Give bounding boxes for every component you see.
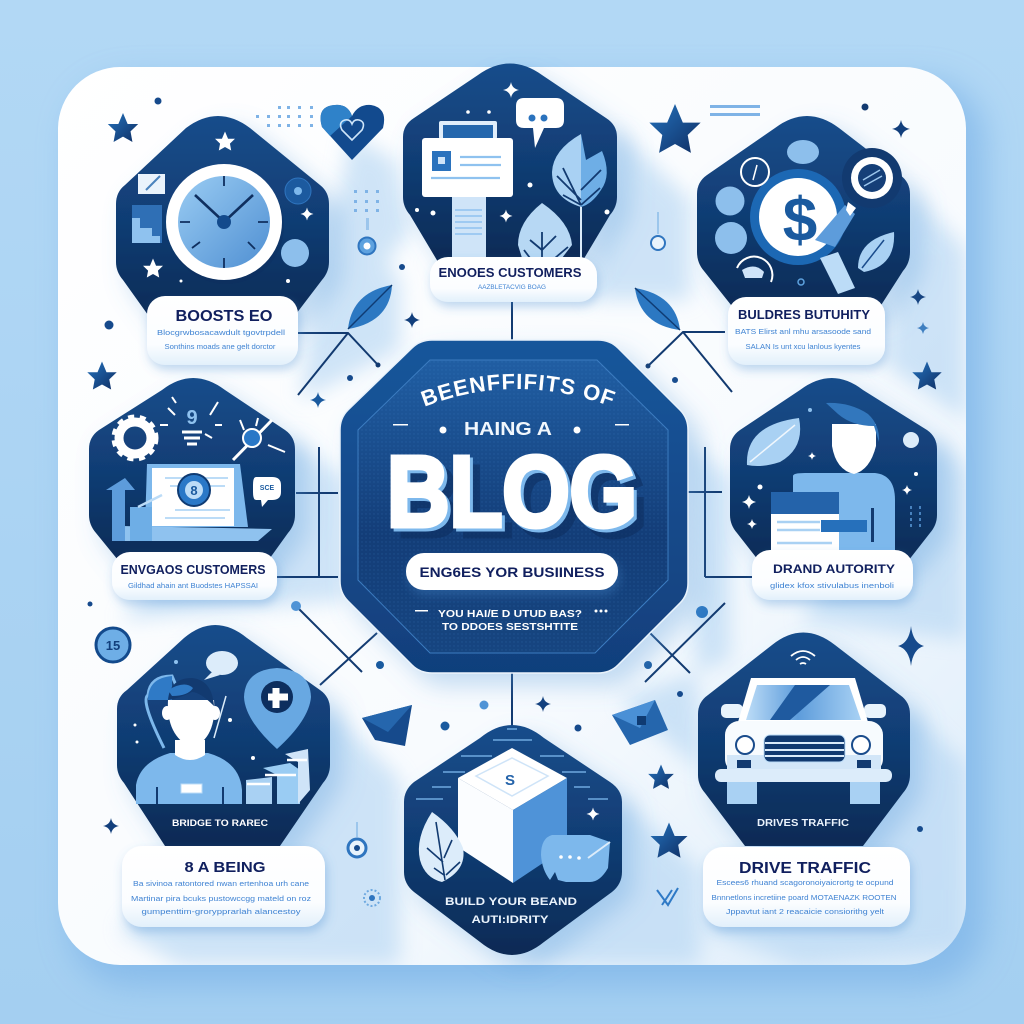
icon: round badges xyxy=(715,140,894,285)
card: drive traffic: Bnnnetlons incretiine poard MOTAENAZK ROOTEN xyxy=(712,893,896,902)
icon: light bulb: 9 xyxy=(186,407,198,429)
soft diagonal shadows xyxy=(120,130,966,965)
card: boosts SEO: BOOSTS EO xyxy=(176,308,272,325)
card: drive traffic: DRIVE TRAFFIC xyxy=(739,860,871,877)
hexagon label: BRIDGE TO RAREC xyxy=(172,818,269,828)
icon: dollar magnifier: $ xyxy=(783,186,817,255)
panel: being xyxy=(117,625,330,927)
hexagon background xyxy=(404,725,622,955)
hexagon background xyxy=(730,378,937,565)
dot texture xyxy=(358,360,668,653)
card: being: gumpenttim-grorypprarlah alancestoy xyxy=(142,907,301,916)
title: BLOG xyxy=(387,436,637,548)
card: enooes customers xyxy=(430,257,597,302)
icon: heart xyxy=(321,105,384,160)
icon: laptop: 8 xyxy=(190,483,198,498)
icon: speech bubble xyxy=(516,98,564,148)
icon: leaf right connector xyxy=(635,288,680,330)
pill label: ENG6ES YOR BUSIINESS xyxy=(420,564,604,580)
icon: calendar badge xyxy=(96,628,130,662)
panel: build brand authority xyxy=(404,725,622,955)
icon: light bulb xyxy=(160,397,222,444)
icon: leaf left connector xyxy=(348,285,392,329)
card: enooes customers: ENOOES CUSTOMERS xyxy=(438,266,582,280)
icon: dollar magnifier xyxy=(750,148,902,294)
hexagon background xyxy=(89,378,295,565)
panel: builds authority xyxy=(697,116,910,365)
card: being: Martinar pira bcuks pustowccgg mateld on roz xyxy=(131,894,311,903)
decorative dashes xyxy=(416,729,608,799)
icon: signboard xyxy=(422,121,513,259)
sub heading: HAING A xyxy=(464,419,552,439)
icon: calendar badge: 15 xyxy=(106,638,120,653)
hexagon label xyxy=(445,896,577,926)
hexagon label: AUTI:IDRITY xyxy=(472,914,549,926)
icon: small mark bottom right xyxy=(657,888,678,905)
card: drive traffic: Jppavtut iant 2 reacaicie consiorithg yelt xyxy=(726,907,885,916)
card: enooes customers: AAZBLETACVIG BOAG xyxy=(478,284,546,291)
panel: engages customers top xyxy=(403,64,617,302)
card: brand authority: DRAND AUTORITY xyxy=(773,562,895,576)
icon: leaves xyxy=(415,82,610,258)
card: boosts SEO xyxy=(147,296,298,365)
card: brand authority xyxy=(752,550,913,600)
icon: charts and tools xyxy=(106,418,285,541)
icon: bubble xyxy=(134,651,255,760)
card: drive traffic: Escees6 rhuand scagoronoiyaicrortg te ocpund xyxy=(716,878,894,887)
icon: car xyxy=(715,678,892,804)
icon: cube: S xyxy=(505,772,515,789)
card: builds authority: BULDRES BUTUHITY xyxy=(738,308,871,322)
dot grids xyxy=(256,105,760,212)
card: engages customers left: ENVGAOS CUSTOMERS xyxy=(120,563,266,577)
panel: engages customers left xyxy=(89,378,295,600)
card: engages customers left xyxy=(112,552,277,600)
hexagon label: DRIVES TRAFFIC xyxy=(757,818,849,829)
footer text xyxy=(415,608,608,633)
card: drive traffic xyxy=(703,847,910,927)
icon: person xyxy=(136,676,242,804)
card: builds authority: SALAN Is unt xcu lanlous kyentes xyxy=(746,342,861,351)
heading decorations xyxy=(393,424,629,434)
title depth: BLOG xyxy=(390,439,640,551)
hexagon background xyxy=(117,625,330,846)
icon: cube xyxy=(458,748,567,883)
card: builds authority xyxy=(728,297,885,365)
card: brand authority: glidex kfox stivulabus inenboli xyxy=(770,583,895,590)
icon: laptop xyxy=(112,464,272,541)
card: being: 8 A BEING xyxy=(184,859,266,876)
icon: speech bubble xyxy=(541,808,610,882)
decorative stars and sparkles xyxy=(87,98,942,858)
card: engages customers left: Gildhad ahain ant Buodstes HAPSSAI xyxy=(128,583,258,590)
card: builds authority: BATS Elirst anl mhu arsasoode sand xyxy=(735,327,871,336)
icon: person with book xyxy=(771,403,895,552)
card: boosts SEO: Blocgrwbosacawdult tgovtrpdell xyxy=(157,328,285,337)
pill label xyxy=(406,553,618,590)
heading arc xyxy=(417,389,620,410)
panel: brand authority xyxy=(730,378,937,600)
heading curved text: BEENFFIFITS OF xyxy=(420,374,616,406)
hexagon background xyxy=(116,116,329,322)
icon: leaf and details xyxy=(742,408,920,530)
card: being: Ba sivinoa ratontored nwan ertenhoa urh cane xyxy=(133,879,309,888)
panel: boosts SEO xyxy=(116,116,329,365)
icon: buildings xyxy=(246,749,310,804)
icon: envelope right xyxy=(612,700,668,745)
icon: leaf xyxy=(419,812,464,882)
hexagon label: BUILD YOUR BEAND xyxy=(445,896,577,908)
icon: wifi xyxy=(791,651,815,664)
hexagon background xyxy=(697,116,910,310)
icon: pin keys xyxy=(348,212,665,906)
connector lines xyxy=(277,300,752,745)
icon: envelope left xyxy=(362,705,412,746)
octagon outer xyxy=(340,340,688,673)
card: being xyxy=(122,846,325,927)
panel: central blog title xyxy=(338,338,712,698)
card: boosts SEO: Sonthins moads ane gelt dorctor xyxy=(164,342,276,351)
hexagon background xyxy=(403,64,617,262)
icon: map pin with plus xyxy=(244,668,311,749)
panel: drives traffic xyxy=(698,632,910,927)
footer text: TO DDOES SESTSHTITE xyxy=(442,621,578,633)
icon: clock xyxy=(166,164,284,284)
footer text: YOU HAI/E D UTUD BAS? xyxy=(438,608,582,620)
icon: gear xyxy=(114,417,156,459)
icon: small symbols xyxy=(132,132,314,283)
hexagon background xyxy=(698,632,910,846)
title shadow: BLOG xyxy=(397,446,647,558)
octagon inner xyxy=(358,360,668,653)
icon: charts and tools: SCE xyxy=(260,485,275,492)
